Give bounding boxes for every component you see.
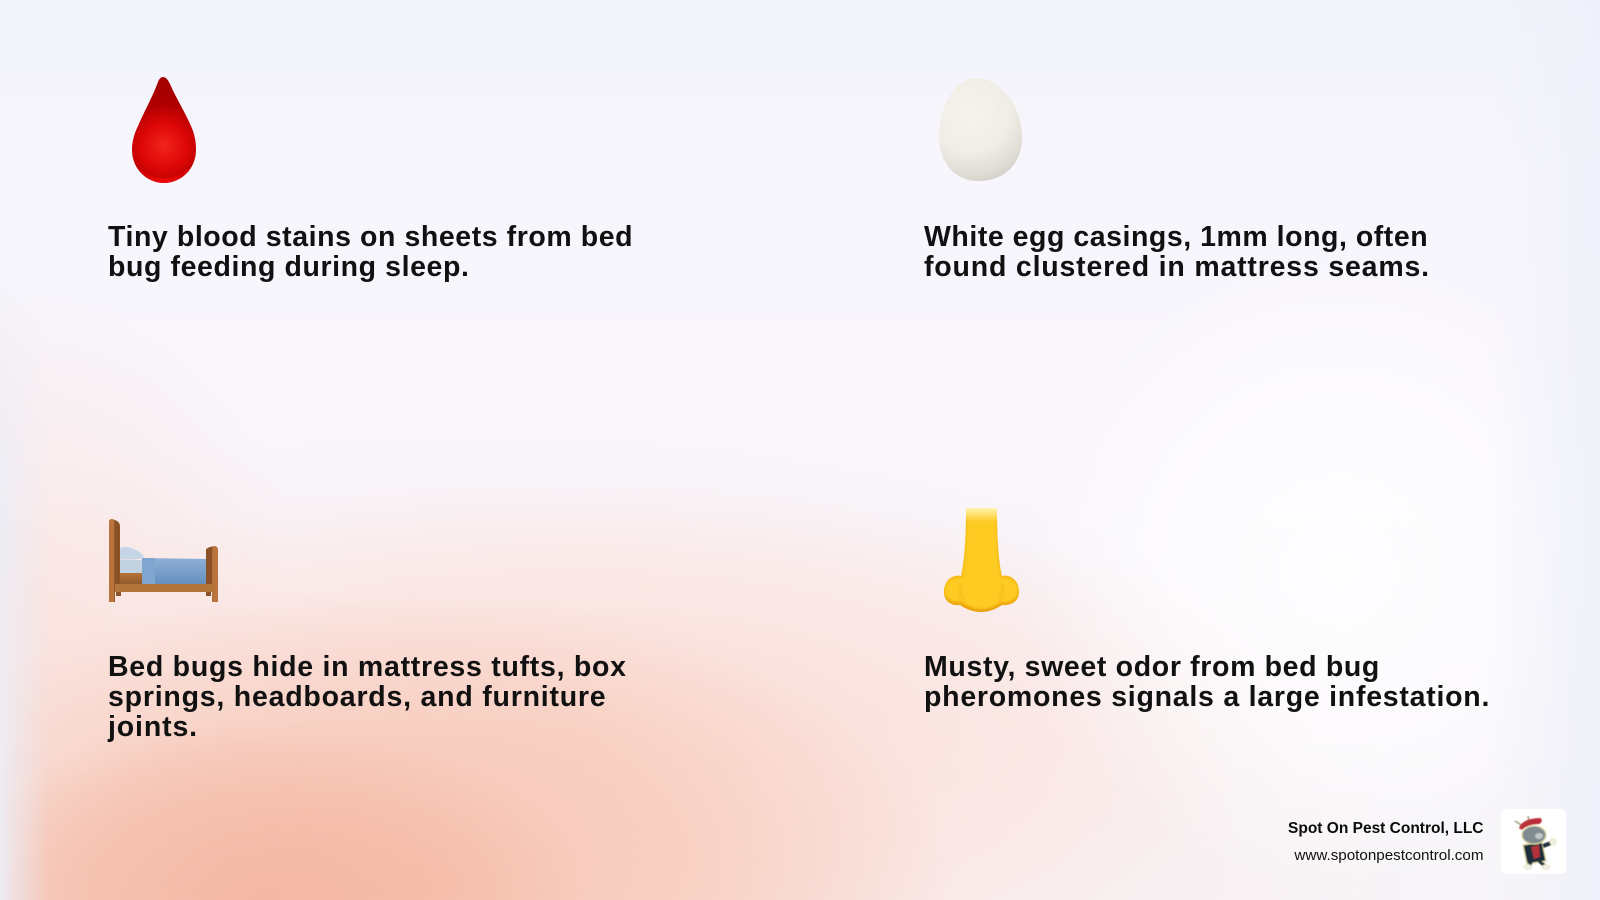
logo: mascot <box>1501 809 1566 874</box>
text: blood stains: Tiny blood stains on sheets from bed <box>108 220 633 252</box>
panel: hiding places <box>108 519 627 742</box>
text: musty odor <box>924 650 1490 712</box>
icon: blood drop <box>132 77 196 183</box>
text: egg casings: White egg casings, 1mm long, often <box>924 220 1428 252</box>
company name: Spot On Pest Control, LLC <box>1288 820 1484 837</box>
panel: egg casings <box>924 78 1430 282</box>
website: www.spotonpestcontrol.com <box>1294 846 1484 864</box>
text: hiding places <box>108 650 627 742</box>
text: hiding places: springs, headboards, and furniture <box>108 680 606 712</box>
icon: bed <box>109 519 218 602</box>
text: egg casings: found clustered in mattress seams. <box>924 250 1430 282</box>
text: blood stains: bug feeding during sleep. <box>108 250 470 282</box>
text: musty odor: Musty, sweet odor from bed bug <box>924 650 1380 682</box>
text: hiding places: joints. <box>108 710 198 742</box>
text: musty odor: pheromones signals a large infestation. <box>924 680 1490 712</box>
text: blood stains <box>108 220 633 282</box>
text: egg casings <box>924 220 1430 282</box>
panel: blood stains <box>108 77 633 282</box>
icon: egg <box>939 78 1022 181</box>
panel: musty odor <box>924 508 1490 712</box>
background gradient <box>0 366 1256 900</box>
icon: nose <box>944 508 1019 612</box>
text: hiding places: Bed bugs hide in mattress tufts, box <box>108 650 627 682</box>
footer: company branding <box>1288 809 1566 874</box>
